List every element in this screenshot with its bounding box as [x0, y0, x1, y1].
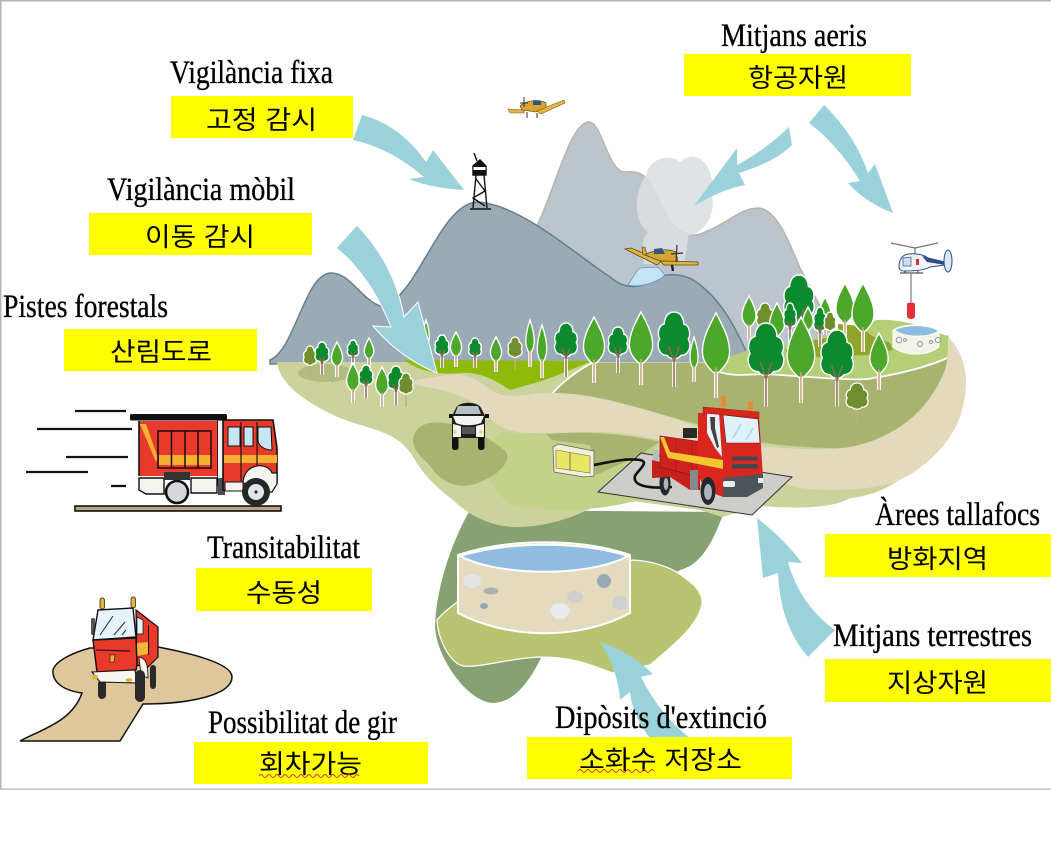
- label: Possibilitat de gir: 회차가능: [259, 749, 362, 779]
- label: Dipòsits d'extinció: [527, 700, 792, 779]
- label: Transitabilitat: [196, 530, 372, 611]
- big water reservoir: [458, 542, 630, 633]
- label: Vigilància fixa: 고정 감시: [206, 105, 317, 135]
- label: Possibilitat de gir: Possibilitat de gir: [208, 705, 397, 741]
- label: Pistes forestals: Pistes forestals: [3, 289, 168, 325]
- icon: small off-road patrol vehicle: [449, 403, 489, 450]
- label: Àrees tallafocs: [825, 496, 1051, 577]
- hydrant cabinet: [553, 444, 594, 477]
- label: Vigilància mòbil: 이동 감시: [145, 222, 255, 252]
- back mountain: [536, 122, 830, 364]
- right olive field: [551, 358, 947, 448]
- lower lobe: dark green ground: [435, 510, 724, 703]
- label: Vigilància fixa: Vigilància fixa: [170, 55, 333, 91]
- label: Pistes forestals: 산림도로: [110, 337, 212, 367]
- arrow: to reservoir: [600, 642, 690, 738]
- darker patch inside the right meadow: [785, 324, 893, 358]
- label: Pistes forestals: [3, 289, 257, 371]
- icon: speeding fire truck: [26, 411, 281, 511]
- icon: fire truck in turning circle: [20, 597, 232, 741]
- icon: fire truck on the pad: [652, 396, 763, 505]
- arrow: to concrete pad: [757, 518, 835, 657]
- forest road: [415, 337, 966, 490]
- distant forest: row of trees: [423, 312, 730, 398]
- bright green meadow: [404, 360, 592, 390]
- label: Vigilància mòbil: Vigilància mòbil: [107, 172, 295, 208]
- smoke cloud: [637, 157, 713, 264]
- label: Transitabilitat: 수동성: [246, 578, 322, 608]
- icon: helicopter with water bucket: [891, 243, 952, 319]
- right forest cluster: [742, 275, 888, 425]
- left olive patch under vehicle: [413, 423, 507, 486]
- icon: watchtower: [470, 153, 491, 209]
- front mountain: [270, 202, 750, 364]
- icon: small aeroplane in the sky: [508, 97, 565, 118]
- main ground: light meadow: [277, 335, 962, 527]
- right light green meadow: [707, 320, 949, 379]
- label: Dipòsits d'extinció: 소화수 저장소: [579, 745, 742, 775]
- left pale patch under trees: [298, 364, 354, 382]
- label: Possibilitat de gir: [194, 705, 428, 784]
- white field boundary line: [551, 358, 947, 395]
- hose: [594, 459, 672, 488]
- label: Dipòsits d'extinció: Dipòsits d'extinció: [555, 700, 767, 736]
- label: Mitjans aeris: Mitjans aeris: [721, 18, 867, 54]
- label: Vigilància mòbil: [89, 172, 312, 255]
- arrow: to smoke cloud: [694, 127, 792, 206]
- label: Mitjans aeris: [684, 18, 911, 96]
- label: Mitjans terrestres: [825, 618, 1051, 702]
- label: Mitjans terrestres: 지상자원: [887, 668, 988, 698]
- central lighter green field: [486, 432, 770, 510]
- lower lobe: olive ground: [437, 560, 702, 673]
- icon: firefighting plane dropping water: [625, 245, 698, 286]
- arrow: to forest road edge: [336, 225, 437, 373]
- label: Àrees tallafocs: 방화지역: [887, 544, 988, 574]
- small water tank: [893, 325, 941, 354]
- arrow: to watchtower: [353, 115, 464, 190]
- label: Vigilància fixa: [170, 55, 353, 138]
- arrow: to helicopter: [809, 105, 893, 213]
- label: Transitabilitat: Transitabilitat: [207, 530, 360, 566]
- left forest cluster: [303, 338, 413, 407]
- label: Mitjans aeris: 항공자원: [748, 63, 848, 93]
- olive strip under the road: [546, 433, 660, 475]
- concrete pad: [598, 453, 792, 515]
